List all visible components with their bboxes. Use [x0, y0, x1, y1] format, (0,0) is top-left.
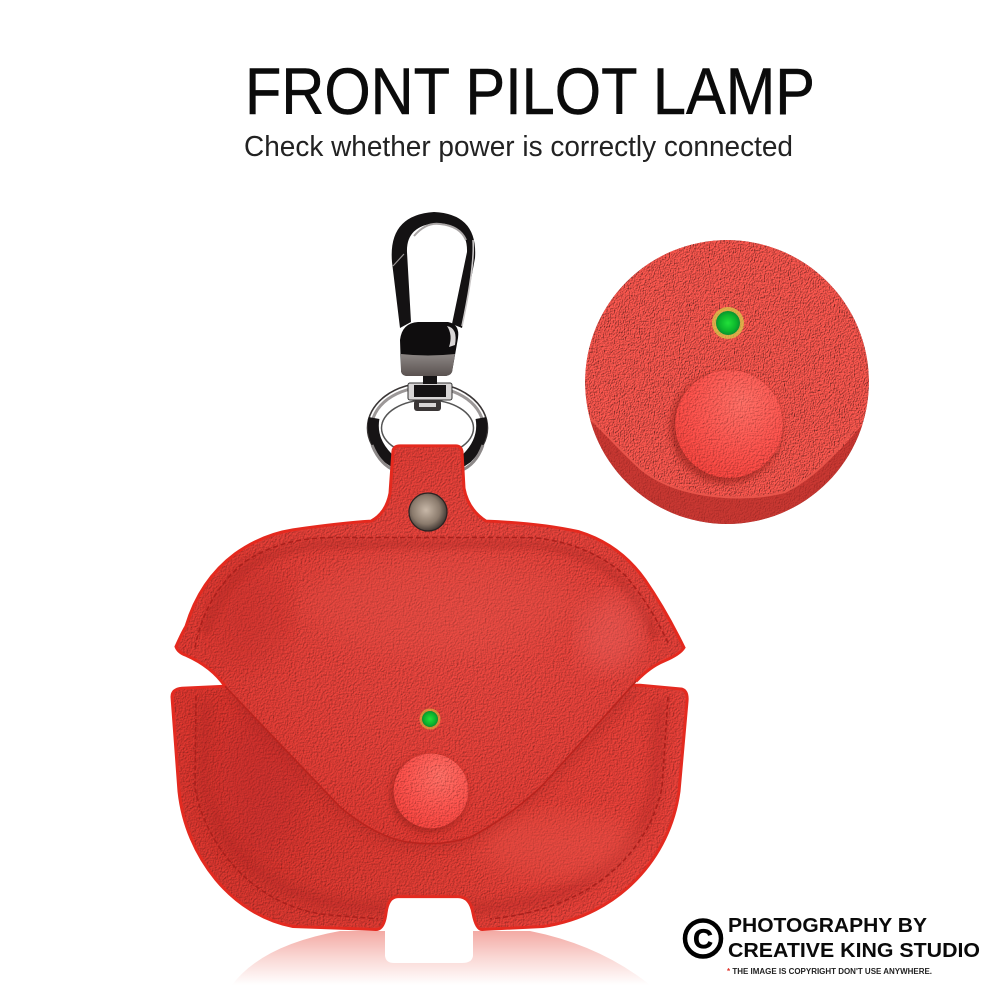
swivel ring [368, 383, 488, 473]
inset lower edge [590, 416, 863, 524]
reflection under case [232, 931, 650, 985]
icon: metal carabiner hook and ring [368, 212, 488, 473]
swivel connector [408, 376, 452, 411]
flap shadow [225, 689, 640, 848]
case shell [172, 446, 687, 930]
icon: copyright symbol: C [693, 924, 713, 954]
hook loop [392, 212, 475, 328]
credit line 1: PHOTOGRAPHY BY [728, 914, 927, 937]
title: FRONT PILOT LAMP [245, 54, 815, 128]
panel: magnified lamp inset [585, 240, 870, 530]
icon: green pilot lamp [420, 708, 440, 730]
case lower body [172, 685, 687, 930]
icon: snap button [390, 754, 468, 833]
inset green lamp [712, 307, 744, 339]
panel: AirPods leather case [172, 446, 687, 930]
infographic canvas [170, 68, 980, 980]
copyright note: * THE IMAGE IS COPYRIGHT DON'T USE ANYWHERE. [727, 967, 932, 976]
inset snap button [670, 370, 783, 484]
icon: rivet [408, 492, 448, 532]
credit line 2: CREATIVE KING STUDIO [728, 939, 980, 962]
inset leather [585, 240, 869, 524]
subtitle: Check whether power is correctly connected [244, 131, 793, 163]
copyright credit [685, 914, 980, 976]
case top flap [176, 446, 684, 844]
icon: copyright symbol [685, 920, 721, 956]
swivel block [400, 322, 458, 376]
